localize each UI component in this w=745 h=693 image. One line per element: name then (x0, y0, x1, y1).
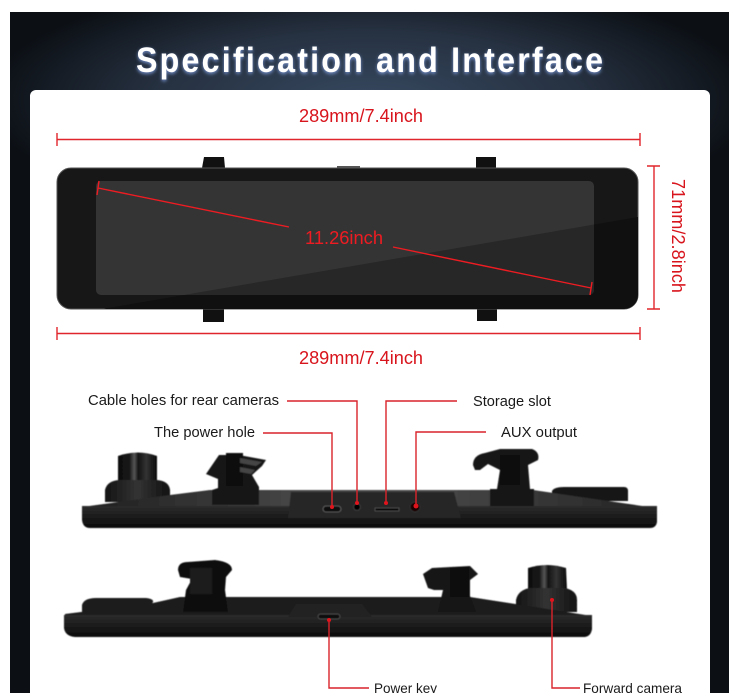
body front band (64, 615, 592, 637)
port housing (288, 492, 461, 518)
callout: forward camera (550, 598, 682, 693)
title: Specification and Interface (136, 42, 603, 80)
left flat camera (82, 598, 153, 612)
height dimension (647, 166, 688, 309)
forward camera (516, 565, 577, 612)
bottom width dimension (57, 327, 640, 368)
top width dimension (57, 106, 640, 146)
body front band (82, 506, 657, 528)
right bracket (473, 449, 538, 506)
callout: storage slot: Storage slot (473, 394, 551, 410)
callout: cable holes for rear cameras (88, 393, 359, 505)
mirror front view (57, 157, 638, 322)
callout: cable holes for rear cameras: Cable holes for rear cameras (88, 393, 279, 409)
screen diagonal dimension (97, 181, 592, 295)
lower bezel reflection (100, 217, 638, 310)
body top surface (65, 597, 592, 620)
body top surface (82, 490, 656, 512)
screen (96, 181, 594, 295)
top width dimension: 289mm/7.4inch (299, 106, 423, 126)
callout: power key (327, 618, 437, 693)
callout: storage slot (384, 394, 551, 505)
mirror bottom view (64, 560, 592, 637)
mounting clips (202, 157, 497, 322)
callout: the power hole (154, 425, 334, 509)
callout: aux output (414, 425, 577, 508)
mirror body (57, 168, 638, 309)
ports (323, 502, 420, 512)
left camera (105, 452, 170, 502)
port housing (288, 604, 372, 617)
mirror top view with ports (82, 449, 657, 528)
callout: the power hole: The power hole (154, 425, 255, 441)
left bracket (178, 560, 232, 612)
screen diagonal dimension: 11.26inch (305, 228, 383, 248)
height dimension: 71mm/2.8inch (668, 179, 688, 293)
right flat camera (552, 487, 628, 501)
right bracket (423, 566, 478, 612)
left bracket (206, 453, 266, 505)
white content card (30, 90, 710, 693)
bottom width dimension: 289mm/7.4inch (299, 348, 423, 368)
callout: aux output: AUX output (501, 425, 577, 441)
